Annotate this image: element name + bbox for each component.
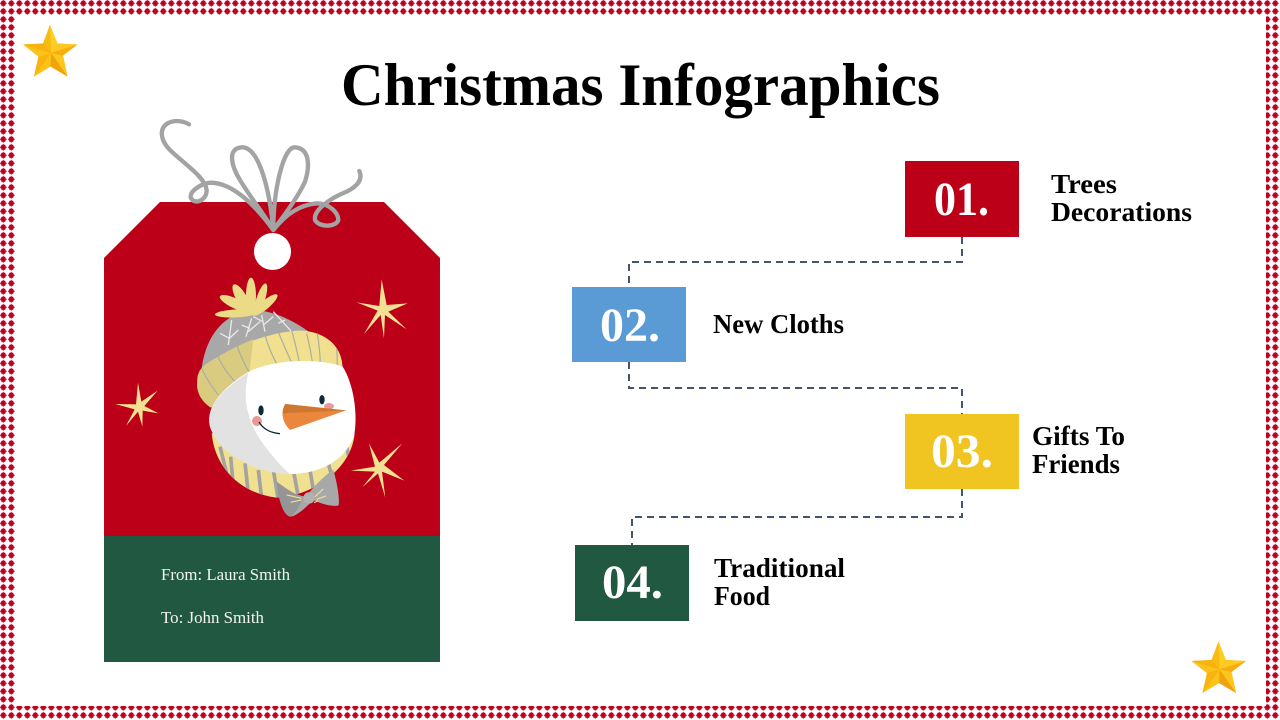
connector: 01 to 02 bbox=[629, 237, 962, 287]
hat pattern bbox=[220, 312, 292, 345]
step 03: 03. bbox=[931, 425, 993, 478]
tag red body bbox=[104, 202, 440, 536]
step 02: New Cloths bbox=[713, 309, 844, 339]
face bbox=[209, 361, 356, 474]
step 01 bbox=[905, 161, 1192, 237]
title: Christmas Infographics bbox=[341, 52, 940, 118]
icon: gold star top left bbox=[23, 25, 78, 76]
step 01: Trees bbox=[1051, 169, 1117, 199]
step 04: 04. bbox=[602, 556, 663, 609]
connector: 03 to 04 bbox=[632, 489, 962, 545]
step 02: 02. bbox=[600, 299, 660, 352]
step 01: Decorations bbox=[1051, 197, 1192, 227]
hat crown bbox=[202, 310, 313, 370]
bow tie bbox=[277, 470, 339, 517]
step 03: Friends bbox=[1032, 449, 1120, 479]
step 02 bbox=[572, 287, 844, 362]
step 04 bbox=[575, 545, 845, 621]
to text: To: John Smith bbox=[161, 608, 265, 627]
from text: From: Laura Smith bbox=[161, 565, 291, 584]
pompom bbox=[215, 278, 280, 319]
step 03: Gifts To bbox=[1032, 421, 1125, 451]
tag green footer bbox=[104, 536, 440, 662]
step 04: Traditional bbox=[714, 553, 845, 583]
mouth bbox=[259, 422, 280, 434]
icon: snowman illustration bbox=[115, 278, 408, 517]
hat brim bbox=[197, 331, 343, 407]
connector: 02 to 03 bbox=[629, 362, 962, 414]
step 03 bbox=[905, 414, 1125, 489]
panel: gift tag bbox=[104, 121, 440, 662]
step 01: 01. bbox=[934, 173, 989, 226]
tag hole bbox=[254, 233, 291, 270]
step 04: Food bbox=[714, 581, 770, 611]
icon: ribbon bow bbox=[162, 121, 360, 230]
scarf bbox=[212, 433, 355, 498]
cheeks bbox=[252, 416, 262, 426]
eyes bbox=[258, 405, 264, 415]
carrot nose bbox=[283, 404, 346, 430]
icon: gold star bottom right bbox=[1192, 642, 1246, 693]
gold sparkles bbox=[115, 279, 408, 498]
